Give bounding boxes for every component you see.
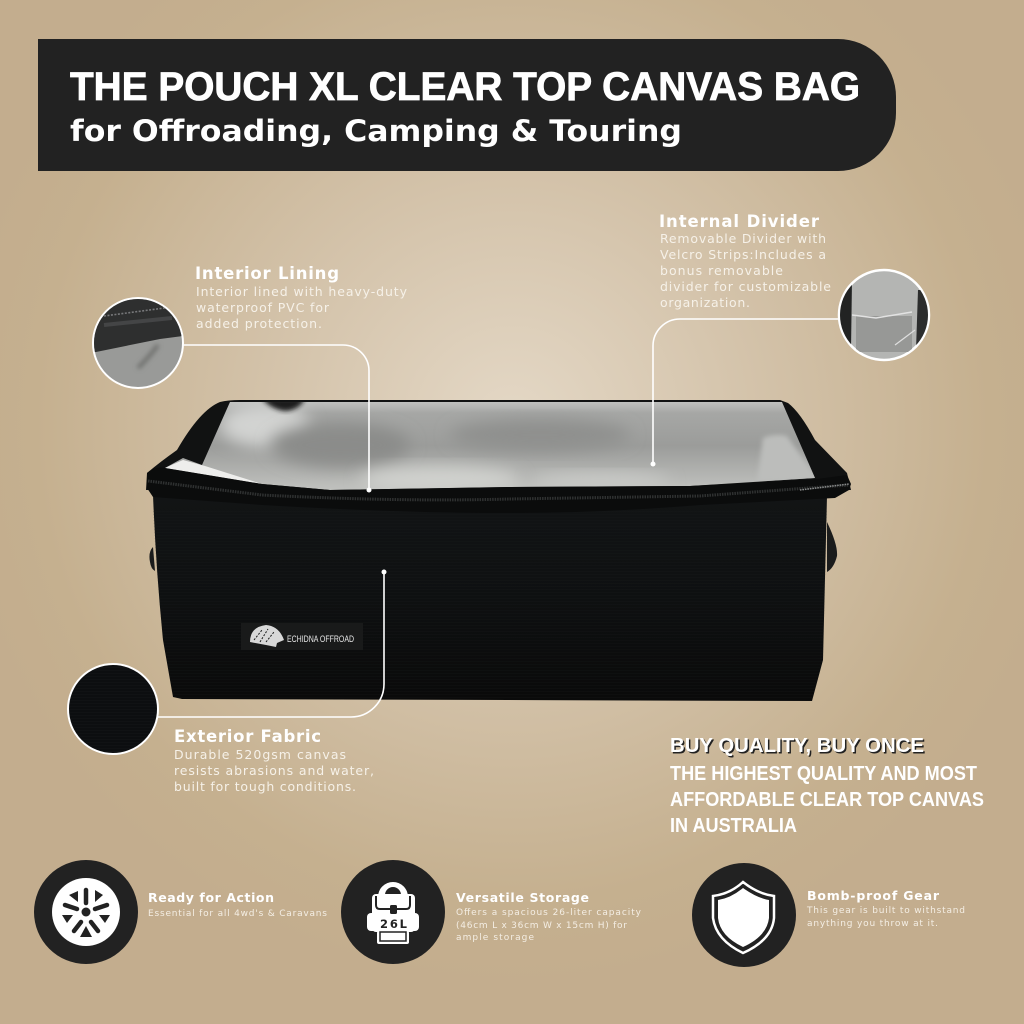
icon: backpack 26L <box>341 860 445 964</box>
callout: internal divider <box>650 212 930 466</box>
description: This gear is built to withstand <box>806 906 965 916</box>
description <box>174 747 374 794</box>
description <box>196 284 408 331</box>
subtitle: for Offroading, Camping & Touring <box>70 114 682 148</box>
detail photo: divider <box>839 270 930 360</box>
slogan <box>670 735 984 837</box>
description: waterproof PVC for <box>196 300 330 315</box>
bag handles <box>149 522 837 572</box>
slogan text: IN AUSTRALIA <box>670 815 797 837</box>
heading: Exterior Fabric <box>174 727 321 746</box>
zipper highlight <box>800 484 849 490</box>
description: resists abrasions and water, <box>174 763 374 778</box>
slogan text: THE HIGHEST QUALITY AND MOST <box>670 763 977 785</box>
leader line <box>180 345 369 490</box>
leader line <box>653 319 840 464</box>
zipper band <box>147 468 851 513</box>
title banner <box>38 39 896 171</box>
leader line <box>158 572 384 717</box>
clear top lining <box>165 402 815 490</box>
echidna logo <box>250 625 284 647</box>
product photo: canvas bag <box>146 398 851 701</box>
description: Velcro Strips:Includes a <box>660 247 826 262</box>
canvas weave <box>153 510 827 701</box>
description: bonus removable <box>660 263 783 278</box>
description: organization. <box>660 295 750 310</box>
description <box>806 906 965 929</box>
feature: versatile storage <box>341 860 642 964</box>
zipper teeth <box>148 481 849 500</box>
title: THE POUCH XL CLEAR TOP CANVAS BAG <box>70 65 860 109</box>
bag lid rim <box>146 400 851 490</box>
heading: Ready for Action <box>148 890 274 905</box>
callout: interior lining <box>90 264 408 492</box>
description <box>660 231 831 310</box>
brand label <box>241 623 363 650</box>
brand label: ECHIDNA OFFROAD <box>287 634 354 645</box>
description: Essential for all 4wd's & Caravans <box>148 909 327 919</box>
detail photo: fabric <box>68 664 158 754</box>
heading: Interior Lining <box>195 264 339 283</box>
description: Durable 520gsm canvas <box>174 747 346 762</box>
heading: Bomb-proof Gear <box>807 888 940 903</box>
description: built for tough conditions. <box>174 779 356 794</box>
heading: Internal Divider <box>659 212 820 231</box>
icon: backpack 26L: 26L <box>380 917 408 931</box>
callout: exterior fabric <box>68 570 386 794</box>
slogan headline: BUY QUALITY, BUY ONCE <box>672 736 926 758</box>
description: added protection. <box>196 316 322 331</box>
description: (46cm L x 36cm W x 15cm H) for <box>456 921 627 931</box>
icon: wheel <box>34 860 138 964</box>
feature: bomb-proof gear <box>692 863 965 967</box>
description: Removable Divider with <box>660 231 826 246</box>
icon: shield <box>692 863 796 967</box>
description: anything you throw at it. <box>807 919 938 929</box>
description <box>456 908 642 943</box>
slogan text: AFFORDABLE CLEAR TOP CANVAS <box>670 789 984 811</box>
detail photo: lining <box>90 295 190 388</box>
canvas body <box>153 495 827 701</box>
description: divider for customizable <box>660 279 831 294</box>
description: Interior lined with heavy-duty <box>196 284 408 299</box>
slogan headline: BUY QUALITY, BUY ONCE <box>670 735 924 757</box>
slogan text <box>670 763 984 837</box>
heading: Versatile Storage <box>456 890 589 905</box>
feature: ready for action <box>34 860 327 964</box>
description: Offers a spacious 26-liter capacity <box>456 908 642 918</box>
description: ample storage <box>456 933 534 943</box>
